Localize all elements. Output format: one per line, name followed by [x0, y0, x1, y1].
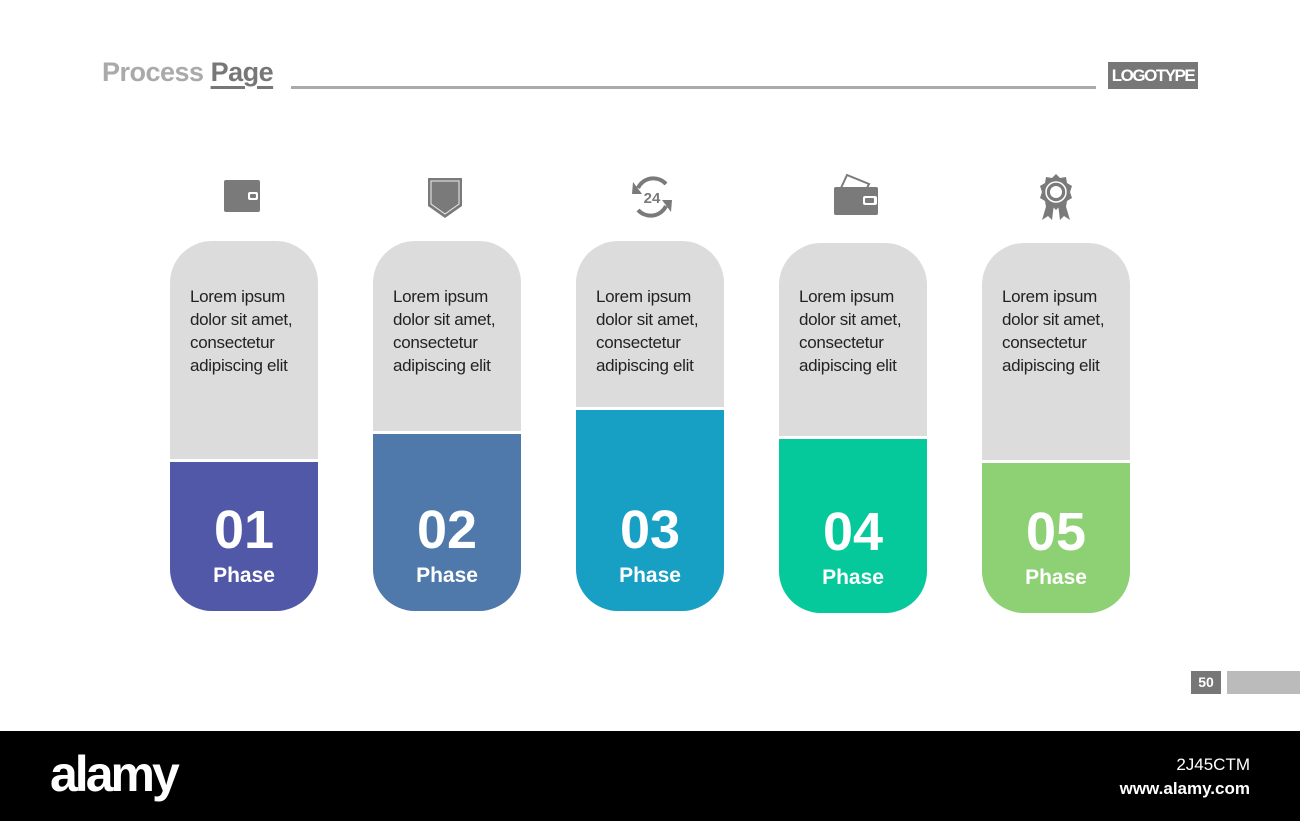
- footer id: [1120, 755, 1250, 798]
- text block 04: Lorem ipsum: [799, 287, 894, 306]
- color block 05: [982, 460, 1130, 613]
- label 03: Phase: [619, 564, 681, 587]
- color block 02: [373, 431, 521, 611]
- icon: award: [1040, 174, 1072, 220]
- panel: phase 02: [373, 241, 521, 611]
- panel: phase 01: [170, 241, 318, 611]
- footer id: 2J45CTM: [1176, 755, 1250, 774]
- text block 03: consectetur: [596, 333, 681, 352]
- text block 04: adipiscing elit: [799, 356, 897, 375]
- page bar: [1227, 671, 1300, 694]
- text block 04: consectetur: [799, 333, 884, 352]
- logotype: [1108, 62, 1198, 89]
- icon: shield: [428, 178, 462, 218]
- panel: phase 03: [576, 241, 724, 611]
- text block 05: adipiscing elit: [1002, 356, 1100, 375]
- text block 04: [799, 287, 901, 375]
- text block 03: Lorem ipsum: [596, 287, 691, 306]
- title: Process Page: [102, 57, 273, 87]
- label 05: Phase: [1025, 566, 1087, 589]
- text block 01: Lorem ipsum: [190, 287, 285, 306]
- icon: 24 hours: 24: [644, 190, 661, 207]
- icon: wallet with card: [834, 174, 878, 215]
- text block 02: Lorem ipsum: [393, 287, 488, 306]
- text block 03: adipiscing elit: [596, 356, 694, 375]
- text block 02: consectetur: [393, 333, 478, 352]
- logotype: LOGOTYPE: [1112, 66, 1194, 85]
- text block 03: [596, 287, 698, 375]
- color block 04: [779, 436, 927, 613]
- label 04: Phase: [822, 566, 884, 589]
- number 03: 03: [620, 500, 680, 560]
- footer band: [0, 731, 1300, 821]
- footer logo: alamy: [50, 746, 177, 802]
- page number: 50: [1198, 674, 1214, 690]
- header rule: [291, 86, 1096, 89]
- text block 02: [393, 287, 495, 375]
- icon: wallet: [224, 180, 260, 212]
- panel: phase 05: [982, 243, 1130, 613]
- text block 01: adipiscing elit: [190, 356, 288, 375]
- text block 05: consectetur: [1002, 333, 1087, 352]
- label 02: Phase: [416, 564, 478, 587]
- text block 05: [1002, 287, 1104, 375]
- page number: [1191, 671, 1221, 694]
- text block 02: dolor sit amet,: [393, 310, 495, 329]
- number 05: 05: [1026, 502, 1086, 562]
- footer id: www.alamy.com: [1120, 779, 1250, 798]
- text block 02: adipiscing elit: [393, 356, 491, 375]
- panel: phase 04: [779, 243, 927, 613]
- number 02: 02: [417, 500, 477, 560]
- icon: 24 hours: [632, 176, 672, 218]
- number 01: 01: [214, 500, 274, 560]
- text block 05: dolor sit amet,: [1002, 310, 1104, 329]
- number 04: 04: [823, 502, 883, 562]
- text block 01: dolor sit amet,: [190, 310, 292, 329]
- text block 03: dolor sit amet,: [596, 310, 698, 329]
- color block 03: [576, 407, 724, 611]
- text block 01: consectetur: [190, 333, 275, 352]
- color block 01: [170, 459, 318, 611]
- text block 04: dolor sit amet,: [799, 310, 901, 329]
- text block 01: [190, 287, 292, 375]
- text block 05: Lorem ipsum: [1002, 287, 1097, 306]
- label 01: Phase: [213, 564, 275, 587]
